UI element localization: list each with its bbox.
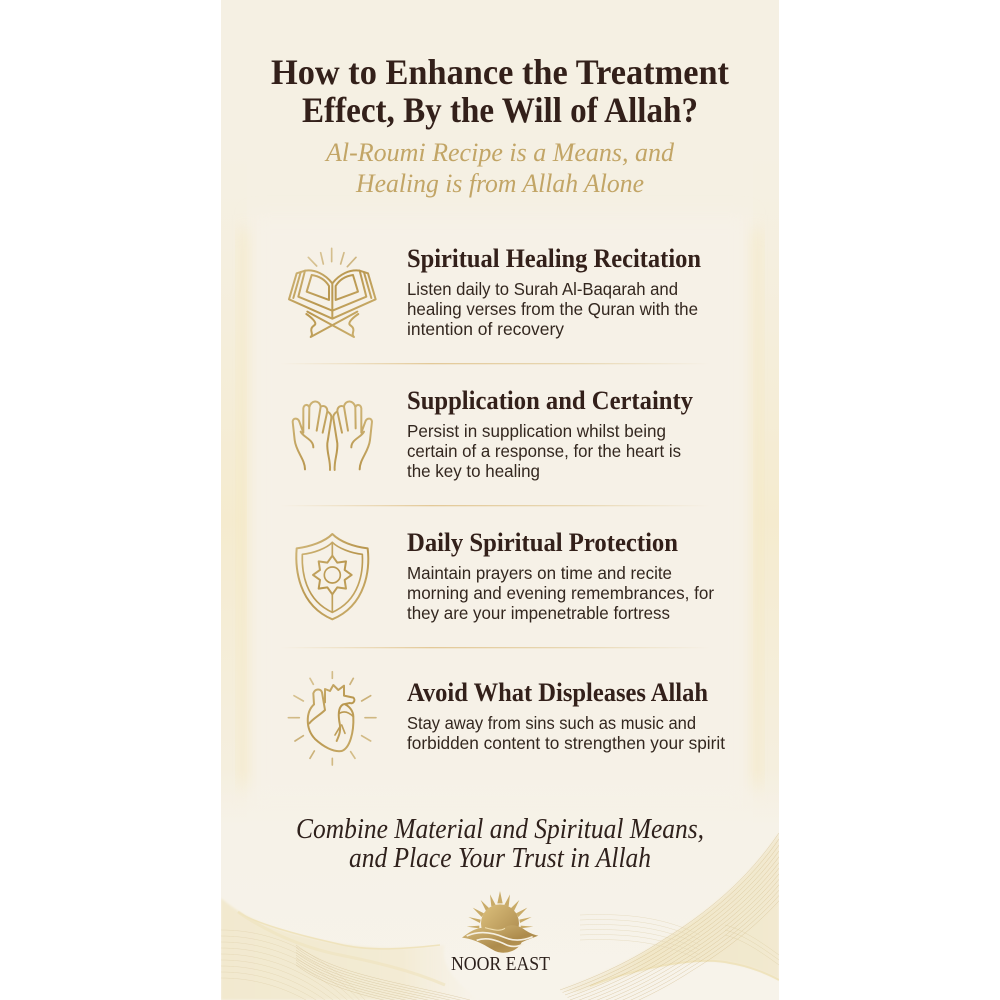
text: avoid description — [407, 713, 725, 753]
logo: sun over waves — [462, 891, 538, 953]
text: recitation description: healing verses from the Quran with the — [407, 299, 698, 319]
subtitle — [324, 138, 675, 198]
closing statement — [296, 814, 704, 874]
text: supplication description — [407, 421, 681, 481]
heading: Spiritual Healing Recitation: Spiritual Healing Recitation — [407, 244, 702, 273]
subtitle: Healing is from Allah Alone — [355, 169, 644, 198]
text: avoid description: forbidden content to strengthen your spirit — [407, 733, 725, 753]
text: supplication description: Persist in supplication whilst being — [407, 421, 666, 441]
title: How to Enhance the Treatment — [271, 52, 729, 92]
heading: Daily Spiritual Protection: Daily Spiritual Protection — [407, 528, 679, 557]
heading: Supplication and Certainty: Supplication and Certainty — [407, 386, 693, 415]
text: recitation description: Listen daily to Surah Al-Baqarah and — [407, 279, 678, 299]
logo wordmark: NOOR EAST — [451, 953, 550, 975]
background panel — [221, 0, 779, 1000]
icon: open book on stand — [289, 248, 376, 337]
title — [271, 52, 729, 130]
text: protection description: Maintain prayers on time and recite — [407, 563, 672, 583]
decorative gold wave ribbons — [221, 833, 809, 1000]
text: protection description: morning and evening remembrances, for — [407, 583, 714, 603]
heading: Avoid What Displeases Allah: Avoid What Displeases Allah — [407, 678, 709, 707]
text: supplication description: the key to healing — [407, 461, 540, 481]
text: recitation description: intention of recovery — [407, 319, 564, 339]
text: recitation description — [407, 279, 698, 339]
closing statement: Combine Material and Spiritual Means, — [296, 814, 704, 845]
subtitle: Al-Roumi Recipe is a Means, and — [324, 138, 675, 167]
text: avoid description: Stay away from sins such as music and — [407, 713, 696, 733]
icon: praying hands — [293, 401, 372, 470]
icon: radiant heart — [288, 672, 376, 765]
text: protection description: they are your impenetrable fortress — [407, 603, 670, 623]
closing statement: and Place Your Trust in Allah — [349, 843, 651, 874]
icon: shield with star — [296, 534, 368, 619]
title: Effect, By the Will of Allah? — [302, 90, 698, 130]
text: protection description — [407, 563, 714, 623]
text: supplication description: certain of a response, for the heart is — [407, 441, 681, 461]
